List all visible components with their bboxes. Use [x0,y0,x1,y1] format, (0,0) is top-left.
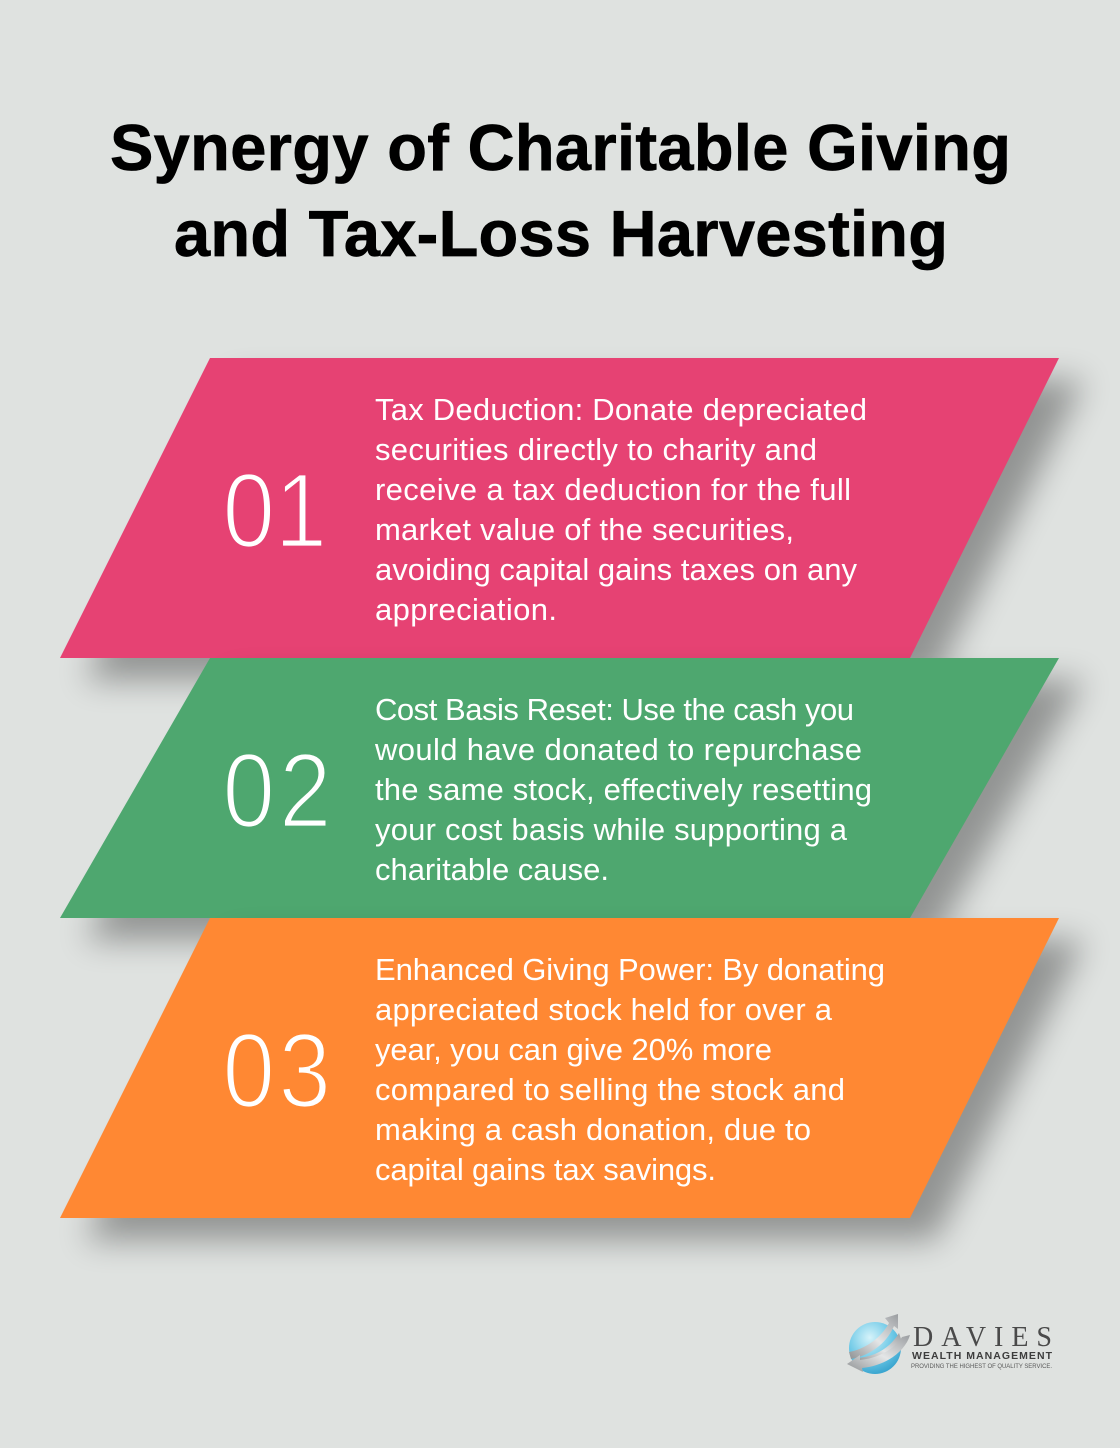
text: tax deduction: securities directly to charity and [375,432,817,467]
text: cost basis reset: Cost Basis Reset: Use the cash you [375,692,854,727]
title: and Tax-Loss Harvesting [174,197,948,270]
text: enhanced giving power: compared to selling the stock and [375,1072,845,1107]
text: enhanced giving power: Enhanced Giving Power: By donating [375,952,885,987]
text: tax deduction: receive a tax deduction for the full [375,472,851,507]
text: tax deduction: Tax Deduction: Donate depreciated [375,392,867,427]
text: enhanced giving power: making a cash donation, due to [375,1112,811,1147]
text: cost basis reset: charitable cause. [375,852,609,887]
title: Synergy of Charitable Giving [110,111,1011,184]
text: tax deduction: avoiding capital gains taxes on any [375,552,858,587]
text: cost basis reset [374,692,872,887]
icon: globe with arrows [847,1314,910,1374]
text: cost basis reset: the same stock, effectively resetting [375,772,872,807]
logo: Davies Wealth Management [847,1314,1053,1374]
text: tax deduction [375,392,867,627]
number 02: 02 [222,732,331,850]
title [110,111,1011,270]
text: cost basis reset: your cost basis while supporting a [375,812,848,847]
panel: 01 tax deduction [60,358,1084,680]
text: enhanced giving power: capital gains tax savings. [375,1152,716,1187]
text: enhanced giving power: year, you can give 20% more [375,1032,772,1067]
text: cost basis reset: would have donated to repurchase [374,732,862,767]
text: tax deduction: market value of the securities, [375,512,794,547]
logo wordmark: DAVIES [913,1322,1052,1353]
panel: 02 cost basis reset [60,658,1084,940]
number 03: 03 [222,1012,331,1130]
text: tax deduction: appreciation. [375,592,557,627]
panel: 03 enhanced giving power [60,918,1084,1240]
text: enhanced giving power [375,952,885,1187]
logo subtitle: WEALTH MANAGEMENT [912,1350,1053,1362]
number 01: 01 [222,452,327,570]
logo tagline: PROVIDING THE HIGHEST OF QUALITY SERVICE. [911,1363,1052,1370]
text: enhanced giving power: appreciated stock held for over a [375,992,833,1027]
